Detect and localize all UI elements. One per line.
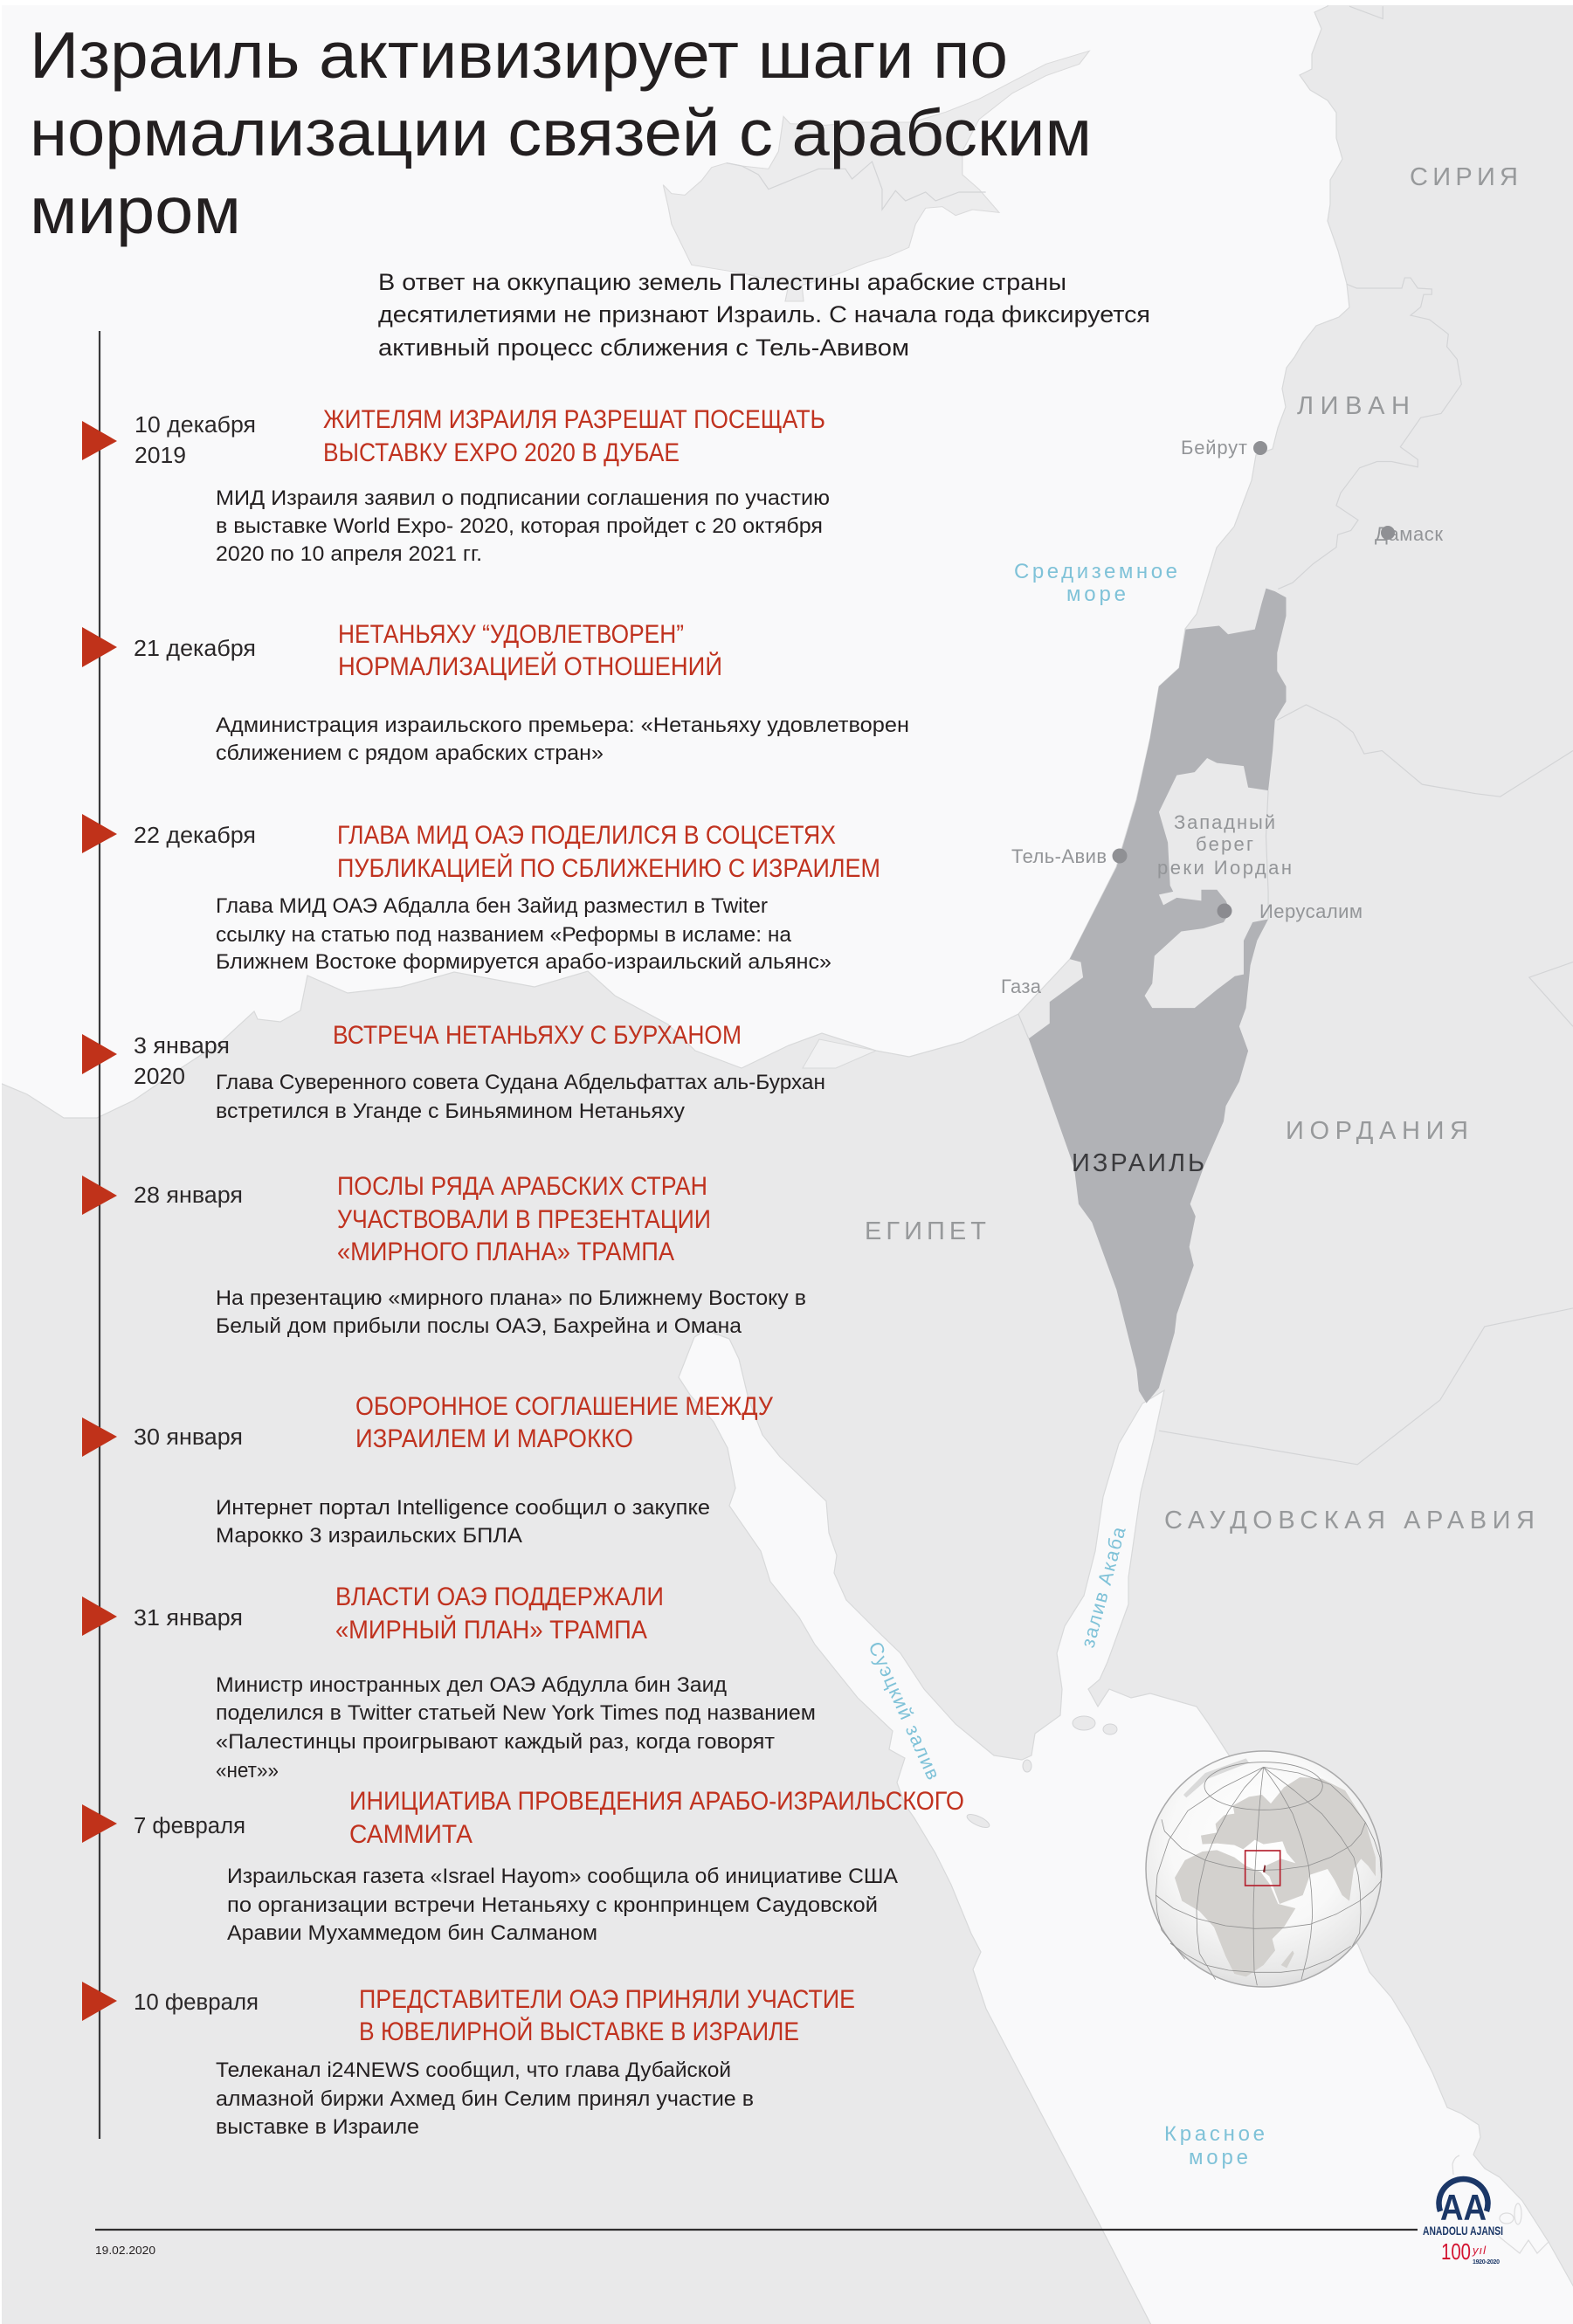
logo: Anadolu Ajansi: AA [1440, 2187, 1487, 2228]
event: 21 December: Администрация израильского премьера: «Нетаньяху удовлетворен [216, 714, 909, 737]
event: 10 December 2019: 10 декабря [135, 413, 256, 438]
event: 30 January: ИЗРАИЛЕМ И МАРОККО [355, 1424, 633, 1453]
footer date: 19.02.2020 [95, 2244, 155, 2257]
event: 10 February: Телеканал i24NEWS сообщил, что глава Дубайской [216, 2058, 731, 2082]
borders: Syria and Lebanon [1278, 6, 1461, 589]
logo: Anadolu Ajansi: ANADOLU AJANSI [1423, 2224, 1503, 2238]
Nile delta lagoon [803, 1039, 876, 1068]
event: 22 December: ГЛАВА МИД ОАЭ ПОДЕЛИЛСЯ В СОЦСЕТЯХ [337, 821, 836, 850]
event: 30 January: Интернет портал Intelligence сообщил о закупке [216, 1496, 710, 1520]
event: 3 January 2020: встретился в Уганде с Биньямином Нетаньяху [216, 1100, 685, 1123]
event: 21 December: 21 декабря [134, 637, 256, 661]
Red Sea islands [965, 1716, 1117, 1830]
event: 21 December: НОРМАЛИЗАЦИЕЙ ОТНОШЕНИЙ [338, 652, 722, 681]
event: 10 December 2019: 2020 по 10 апреля 2021 гг. [216, 542, 482, 566]
city: Beirut: Бейрут [1181, 437, 1247, 459]
event: 30 January: ОБОРОННОЕ СОГЛАШЕНИЕ МЕЖДУ [355, 1392, 773, 1421]
city: Jerusalem: Иерусалим [1259, 900, 1363, 922]
event: 22 December: ссылку на статью под названием «Реформы в исламе: на [216, 923, 792, 947]
event: 7 February: ИНИЦИАТИВА ПРОВЕДЕНИЯ АРАБО-ИЗРАИЛЬСКОГО [349, 1787, 964, 1816]
event: 7 February [82, 1787, 964, 1945]
event: 28 January: ПОСЛЫ РЯДА АРАБСКИХ СТРАН [337, 1172, 707, 1201]
event: 31 January: 31 января [134, 1606, 243, 1631]
sea label: Red Sea [1164, 2122, 1265, 2169]
event: 22 December: ПУБЛИКАЦИЕЙ ПО СБЛИЖЕНИЮ С ИЗРАИЛЕМ [337, 853, 880, 883]
logo: Anadolu Ajansi: yıl [1472, 2244, 1487, 2257]
sea label: Red Sea: Красное [1164, 2122, 1265, 2146]
label: Gaza: Газа [1001, 976, 1042, 997]
event: 10 December 2019: МИД Израиля заявил о подписании соглашения по участию [216, 486, 830, 510]
event: 21 December: сближением с рядом арабских стран» [216, 741, 604, 765]
country label: Jordan: ИОРДАНИЯ [1286, 1117, 1468, 1145]
event: 30 January: 30 января [134, 1425, 243, 1450]
event: 3 January 2020 [82, 1021, 825, 1123]
event: 3 January 2020: 3 января [134, 1034, 230, 1059]
event: 10 December 2019 [82, 405, 830, 566]
event: 22 December [82, 814, 880, 974]
event: 22 December: 22 декабря [134, 824, 256, 848]
country label: Syria: СИРИЯ [1410, 163, 1518, 191]
logo: Anadolu Ajansi [1423, 2179, 1503, 2265]
sea label: Mediterranean [1014, 560, 1177, 606]
intro paragraph: активный процесс сближения с Тель-Авивом [378, 334, 909, 361]
event: 28 January: УЧАСТВОВАЛИ В ПРЕЗЕНТАЦИИ [337, 1205, 711, 1234]
country label: Egypt: ЕГИПЕТ [865, 1217, 986, 1245]
sea label: Mediterranean: море [1066, 583, 1126, 606]
city: Tel Aviv: Тель-Авив [1011, 845, 1107, 867]
event: 31 January [82, 1583, 816, 1783]
event: 10 February [82, 1982, 855, 2139]
event: 22 December: Ближнем Востоке формируется арабо-израильский альянс» [216, 950, 831, 974]
event: 31 January: поделился в Twitter статьей New York Times под названием [216, 1701, 816, 1725]
event: 28 January: 28 января [134, 1183, 243, 1208]
event: 10 December 2019: ЖИТЕЛЯМ ИЗРАИЛЯ РАЗРЕШАТ ПОСЕЩАТЬ [323, 405, 825, 434]
event: 21 December: НЕТАНЬЯХУ “УДОВЛЕТВОРЕН” [338, 620, 684, 649]
label: West Bank: реки Иордан [1157, 857, 1292, 879]
intro paragraph: В ответ на оккупацию земель Палестины арабские страны [378, 269, 1066, 295]
event: 10 February: 10 февраля [134, 1990, 259, 2015]
event: 7 February: 7 февраля [134, 1814, 245, 1838]
title [30, 18, 1092, 247]
title: нормализации связей с арабским [30, 96, 1092, 169]
event: 31 January: Министр иностранных дел ОАЭ Абдулла бин Заид [216, 1673, 727, 1697]
title: миром [30, 174, 241, 247]
event: 3 January 2020: ВСТРЕЧА НЕТАНЬЯХУ С БУРХАНОМ [333, 1021, 742, 1050]
event: 3 January 2020: Глава Суверенного совета Судана Абдельфаттах аль-Бурхан [216, 1071, 825, 1094]
event: 3 January 2020: 2020 [134, 1065, 185, 1089]
event: 7 February: Аравии Мухаммедом бин Салманом [227, 1921, 597, 1945]
event: 7 February: по организации встречи Нетаньяху с кронпринцем Саудовской [227, 1893, 878, 1917]
label: West Bank [1157, 811, 1292, 879]
country label: Israel: ИЗРАИЛЬ [1072, 1149, 1204, 1177]
timeline axis [99, 331, 100, 2139]
inset globe [1146, 1751, 1382, 1987]
sea: Mediterranean [0, 0, 1349, 1118]
Israel territory [1029, 589, 1286, 1403]
intro paragraph [378, 269, 1150, 361]
sea label: Gulf of Aqaba: залив Акаба [1077, 1524, 1130, 1650]
event: 7 February: Израильская газета «Israel Hayom» сообщила об инициативе США [227, 1865, 898, 1888]
event: 10 February: ПРЕДСТАВИТЕЛИ ОАЭ ПРИНЯЛИ УЧАСТИЕ [359, 1985, 855, 2014]
country label: Lebanon: ЛИВАН [1297, 392, 1410, 420]
sea label: Gulf of Suez: Суэцкий залив [864, 1638, 944, 1783]
event: 28 January: На презентацию «мирного плана» по Ближнему Востоку в [216, 1286, 806, 1310]
event: 22 December: Глава МИД ОАЭ Абдалла бен Зайид разместил в Twiter [216, 894, 768, 918]
sea: Red Sea and gulfs [679, 1330, 1573, 2324]
sea label: Mediterranean: Средиземное [1014, 560, 1177, 583]
event: 31 January: «Палестинцы проигрывают каждый раз, когда говорят [216, 1730, 775, 1754]
borders: Jordan and Saudi Arabia [1018, 705, 1573, 1465]
sea label: Red Sea: море [1189, 2146, 1248, 2169]
event: 31 January: «МИРНЫЙ ПЛАН» ТРАМПА [335, 1615, 647, 1645]
intro paragraph: десятилетиями не признают Израиль. С начала года фиксируется [378, 301, 1150, 328]
label: West Bank: берег [1196, 833, 1253, 855]
event: 10 December 2019: 2019 [135, 444, 186, 468]
city: Damascus: Дамаск [1375, 523, 1443, 545]
logo: Anadolu Ajansi: 1920-2020 [1473, 2259, 1500, 2265]
Cyprus [663, 51, 1089, 301]
event: 21 December [82, 620, 909, 765]
event: 10 December 2019: в выставке World Expo- 2020, которая пройдет с 20 октября [216, 514, 823, 538]
event: 31 January: ВЛАСТИ ОАЭ ПОДДЕРЖАЛИ [335, 1583, 664, 1611]
title: Израиль активизирует шаги по [30, 18, 1008, 92]
event: 10 February: алмазной биржи Ахмед бин Селим принял участие в [216, 2087, 754, 2111]
event: 30 January: Марокко 3 израильских БПЛА [216, 1524, 522, 1548]
logo: Anadolu Ajansi: 100 [1441, 2238, 1471, 2265]
event: 28 January: «МИРНОГО ПЛАНА» ТРАМПА [337, 1238, 674, 1266]
event: 10 December 2019: ВЫСТАВКУ EXPO 2020 В ДУБАЕ [323, 438, 680, 467]
event: 30 January [82, 1392, 773, 1548]
footer rule [95, 2229, 1418, 2231]
event: 7 February: САММИТА [349, 1820, 473, 1849]
event: 10 February: выставке в Израиле [216, 2115, 419, 2139]
event: 31 January: «нет»» [216, 1759, 279, 1783]
event: 28 January [82, 1172, 806, 1338]
event: 10 February: В ЮВЕЛИРНОЙ ВЫСТАВКЕ В ИЗРАИЛЕ [359, 2017, 799, 2046]
label: West Bank: Западный [1174, 811, 1275, 833]
Red Sea south islands [1452, 2155, 1549, 2253]
country label: Saudi Arabia: САУДОВСКАЯ АРАВИЯ [1164, 1507, 1535, 1534]
event: 28 January: Белый дом прибыли послы ОАЭ, Бахрейна и Омана [216, 1314, 742, 1338]
